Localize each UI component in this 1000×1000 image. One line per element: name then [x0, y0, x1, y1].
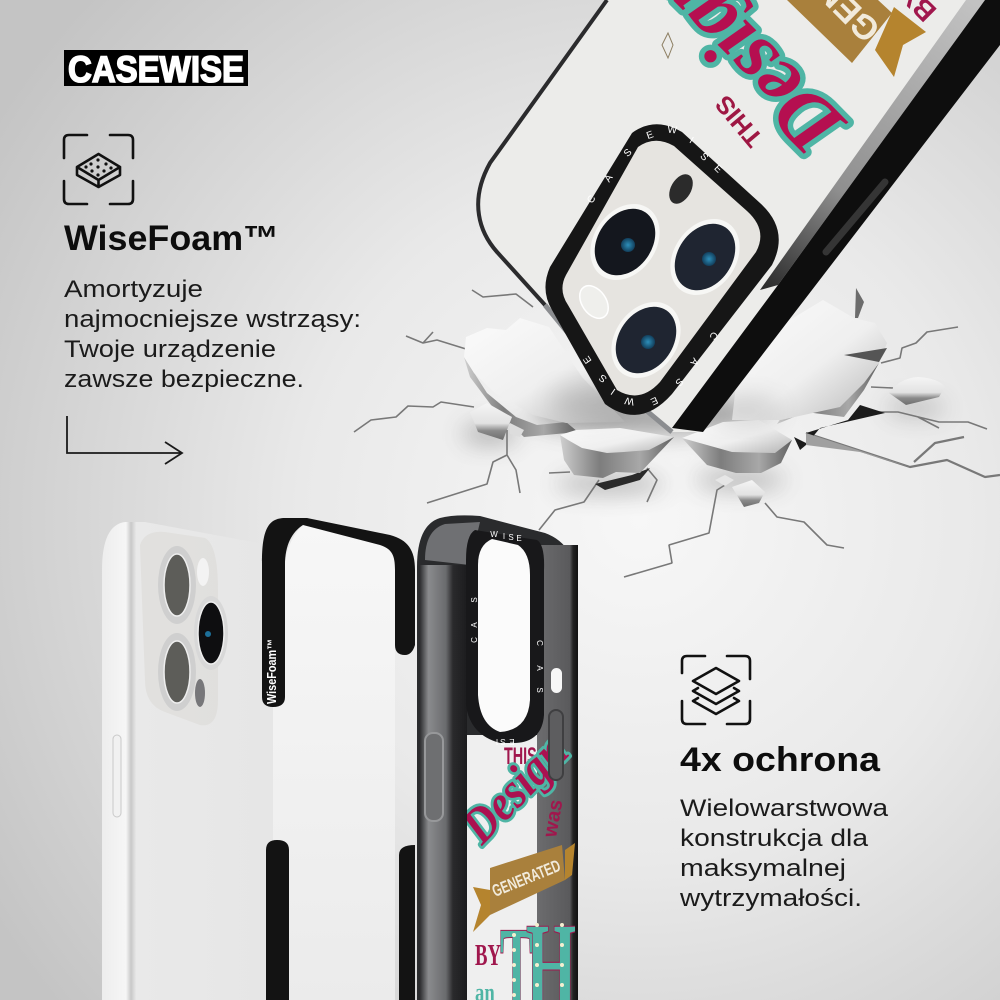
tinted back panel [537, 545, 578, 1000]
ring lettering: W [623, 394, 635, 407]
ring lettering: S [508, 533, 514, 542]
ring lettering: E [581, 353, 594, 365]
logo: CASEWISE: CASEWISE [68, 49, 244, 90]
artwork on case: Design [449, 723, 579, 854]
ring lettering: C [535, 640, 544, 646]
artwork on case: was [539, 798, 567, 840]
text block: WiseFoam description: Twoje urządzenie [64, 336, 276, 363]
shard: centre right [682, 420, 792, 473]
ring lettering: C [470, 637, 479, 643]
sensor and flash [574, 170, 698, 324]
right edge: black band [672, 0, 1000, 432]
ring lettering: C [706, 329, 720, 342]
case body [478, 0, 1000, 432]
dark fissure under centre shard [595, 468, 650, 490]
icon: layers [682, 656, 750, 724]
ring lettering: E [516, 534, 522, 543]
shard: left slab [464, 318, 625, 437]
text block: WiseFoam description [64, 276, 361, 393]
case side [417, 515, 578, 1000]
arrow [67, 416, 182, 464]
text block: WiseFoam description: Amortyzuje [64, 276, 203, 303]
camera opening [478, 539, 530, 732]
camera plateau [140, 532, 218, 725]
artwork on top phone: THIS [710, 90, 769, 152]
ring lettering: C [585, 194, 598, 206]
ring lettering: S [597, 371, 609, 384]
artwork on case [467, 740, 575, 1000]
impact shadows [462, 395, 945, 492]
ring lettering: W [490, 530, 498, 539]
WiseFoam black frame [262, 518, 415, 707]
ring lettering: S [470, 597, 479, 603]
white phone [102, 522, 273, 1000]
foam strip: lower left [266, 840, 289, 1000]
lens: lower [158, 633, 196, 711]
lens: middle [194, 596, 228, 670]
ring lettering: S [500, 737, 506, 746]
text block: protection description [679, 795, 889, 912]
left edge of case [478, 0, 607, 305]
ring lettering: A [687, 356, 700, 368]
ring lettering: A [470, 622, 479, 628]
heading: WiseFoam: WiseFoam™ [64, 219, 279, 258]
heading: 4x ochrona: 4x ochrona [680, 741, 881, 779]
text block: WiseFoam description: zawsze bezpieczne. [64, 366, 304, 393]
text block: protection description: wytrzymałości. [679, 885, 862, 912]
ring lettering: E [648, 394, 659, 407]
ring lettering: E [509, 737, 515, 746]
camera ring [466, 530, 544, 743]
artwork on top phone [662, 0, 937, 160]
flash cut-out [551, 668, 562, 693]
text block: protection description: maksymalnej [680, 855, 846, 882]
clear case with art [417, 515, 579, 1000]
camera island [562, 141, 760, 395]
ring lettering: E [712, 163, 724, 176]
ring lettering: A [603, 172, 616, 184]
crack illustration [354, 288, 1000, 577]
lens: bottom [597, 289, 695, 391]
right edge: silver strip [760, 0, 985, 290]
ring lettering: E [645, 129, 655, 142]
shard: right slab [732, 288, 887, 424]
ring lettering: S [672, 376, 685, 388]
ring lettering: I [609, 386, 618, 396]
ring lettering: S [535, 687, 544, 693]
artwork on case: BY [475, 937, 501, 972]
WiseFoam tab label: WiseFoam™ [265, 639, 279, 704]
ring lettering: I [687, 135, 695, 146]
crack lines [354, 290, 1000, 577]
shard: centre left [560, 428, 674, 478]
artwork on case: GENERATED [489, 856, 563, 901]
text block: protection description: Wielowarstwowa [680, 795, 889, 822]
text block: protection description: konstrukcja dla [680, 825, 869, 852]
case button [425, 733, 443, 821]
side button [826, 182, 885, 252]
lens: top right [656, 206, 754, 308]
ring lettering: I [503, 532, 505, 541]
ring lettering: S [698, 151, 710, 164]
lens: top left [576, 191, 674, 293]
lens: upper [158, 546, 196, 624]
second button [549, 710, 563, 780]
foam strip: lower right [399, 845, 415, 1000]
side button [113, 735, 121, 817]
icon: foam layer [64, 135, 133, 204]
ring lettering: A [535, 665, 544, 671]
clear back [467, 735, 539, 1000]
ring lettering [470, 530, 544, 746]
top phone with clear case [478, 0, 1000, 432]
camera ring [545, 124, 779, 415]
flash and sensor [195, 558, 209, 707]
ring lettering: S [622, 147, 635, 159]
case top highlight [425, 522, 480, 565]
artwork on case: THIS [504, 743, 537, 770]
small rocks [470, 377, 945, 507]
text block: WiseFoam description: najmocniejsze wstrząsy: [64, 306, 361, 333]
ring lettering: I [496, 737, 498, 746]
foam frame interior [273, 525, 395, 1000]
shadow cast by phone on slabs [550, 386, 780, 424]
dark fissure [794, 405, 885, 450]
ring lettering [581, 125, 724, 407]
ring lettering: W [667, 125, 678, 136]
